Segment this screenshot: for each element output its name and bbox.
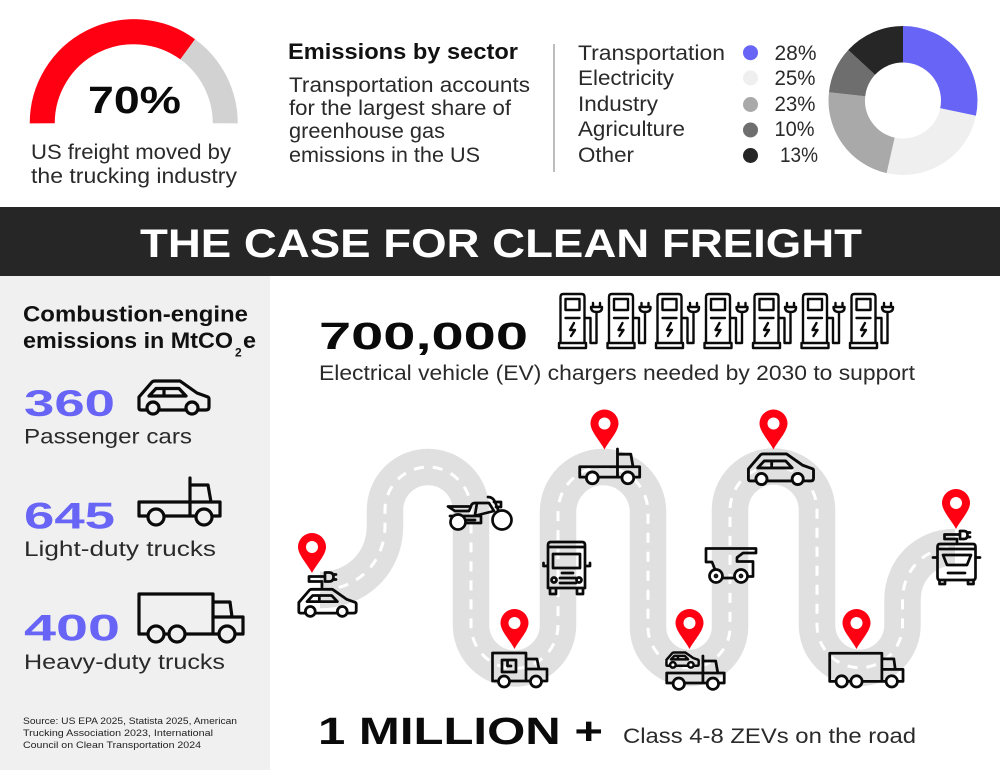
legend row: other <box>578 144 818 167</box>
icon: car on road <box>748 454 814 485</box>
panel heading <box>23 302 256 360</box>
stat: light-duty trucks: Light-duty trucks <box>24 538 216 561</box>
panel: combustion-engine emissions <box>0 276 270 770</box>
heading: emissions by sector: Emissions by sector <box>288 39 518 64</box>
stat: passenger cars: 360 <box>24 383 115 424</box>
source note: Trucking Association 2023, International <box>23 728 213 739</box>
map pin: car carrier <box>676 609 704 649</box>
legend row: other: Other <box>578 144 634 167</box>
legend row: electricity: 25% <box>774 67 816 90</box>
gauge: 70 percent of freight <box>42 32 225 123</box>
icon: box truck <box>139 594 243 642</box>
icon: car carrier truck <box>666 652 724 689</box>
panel heading: emissions in MtCO <box>23 328 233 353</box>
legend row: industry: Industry <box>578 93 659 116</box>
stat: 700,000 chargers: 700,000 <box>319 316 528 358</box>
text block: transportation share: Transportation accounts <box>289 74 530 97</box>
winding road <box>320 466 955 668</box>
icon: delivery van <box>492 653 547 687</box>
stat: passenger cars <box>24 381 209 448</box>
legend row: transportation <box>578 42 816 65</box>
legend row: transportation: 28% <box>774 42 816 65</box>
legend row: industry <box>578 93 816 116</box>
panel heading: e <box>243 328 256 353</box>
map pin: delivery van <box>500 609 528 649</box>
stat: light-duty trucks <box>24 478 220 561</box>
text block: transportation share: greenhouse gas <box>289 120 445 143</box>
legend row: agriculture: Agriculture <box>578 118 685 141</box>
title banner: THE CASE FOR CLEAN FREIGHT <box>140 222 862 266</box>
legend row: agriculture <box>578 118 814 141</box>
text block: transportation share: emissions in the US <box>289 144 480 167</box>
source note: Council on Clean Transportation 2024 <box>23 740 201 751</box>
stat: passenger cars: Passenger cars <box>24 426 192 448</box>
icon: pickup truck <box>139 478 220 525</box>
icons: row of EV chargers <box>559 294 893 348</box>
legend row: industry: 23% <box>774 93 816 116</box>
stat: 1 million ZEVs: 1 MILLION + <box>318 711 603 753</box>
icon: bus <box>544 542 590 594</box>
text block: chargers caption: Electrical vehicle (EV) chargers needed by 2030 to support <box>319 362 915 385</box>
legend: emissions by sector <box>578 42 818 167</box>
source note <box>23 716 237 751</box>
panel heading: 2 <box>235 346 242 360</box>
legend row: transportation: Transportation <box>578 42 725 65</box>
map pin: pickup truck <box>590 410 618 450</box>
icon: car <box>139 381 209 414</box>
legend row: electricity <box>578 67 816 90</box>
gauge caption: US freight moved by <box>31 141 232 164</box>
icon: box truck on road <box>830 653 903 687</box>
legend row: other: 13% <box>780 144 818 167</box>
gauge caption: the trucking industry <box>31 165 238 188</box>
text block: transportation share: for the largest share of <box>289 97 511 120</box>
icon: pickup truck on road <box>580 449 640 484</box>
stat: heavy-duty trucks: Heavy-duty trucks <box>24 651 225 674</box>
panel heading: Combustion-engine <box>23 302 248 326</box>
stat: heavy-duty trucks: 400 <box>24 608 120 648</box>
donut chart: emissions by sector <box>847 44 959 157</box>
text block: transportation share <box>289 74 530 167</box>
icon: electric car <box>299 572 356 616</box>
title banner <box>0 207 1000 276</box>
gauge value: 70% <box>88 80 181 122</box>
gauge arc: red share <box>42 32 188 123</box>
icon: motorcycle <box>448 497 512 530</box>
map pin: electric car <box>298 533 326 573</box>
gauge caption <box>31 141 238 188</box>
text block: ZEV caption: Class 4-8 ZEVs on the road <box>623 725 916 748</box>
legend row: agriculture: 10% <box>774 118 814 141</box>
source note: Source: US EPA 2025, Statista 2025, American <box>23 716 237 727</box>
stat: light-duty trucks: 645 <box>24 496 115 536</box>
icon: flatbed truck <box>706 548 756 582</box>
map pin: car <box>760 410 788 450</box>
gauge arc: grey remainder <box>188 49 225 123</box>
icon: electric bus <box>933 531 980 584</box>
stat: heavy-duty trucks <box>24 594 243 674</box>
map pin: box truck <box>842 609 870 649</box>
legend row: electricity: Electricity <box>578 67 675 90</box>
map pin: electric bus <box>942 489 970 529</box>
